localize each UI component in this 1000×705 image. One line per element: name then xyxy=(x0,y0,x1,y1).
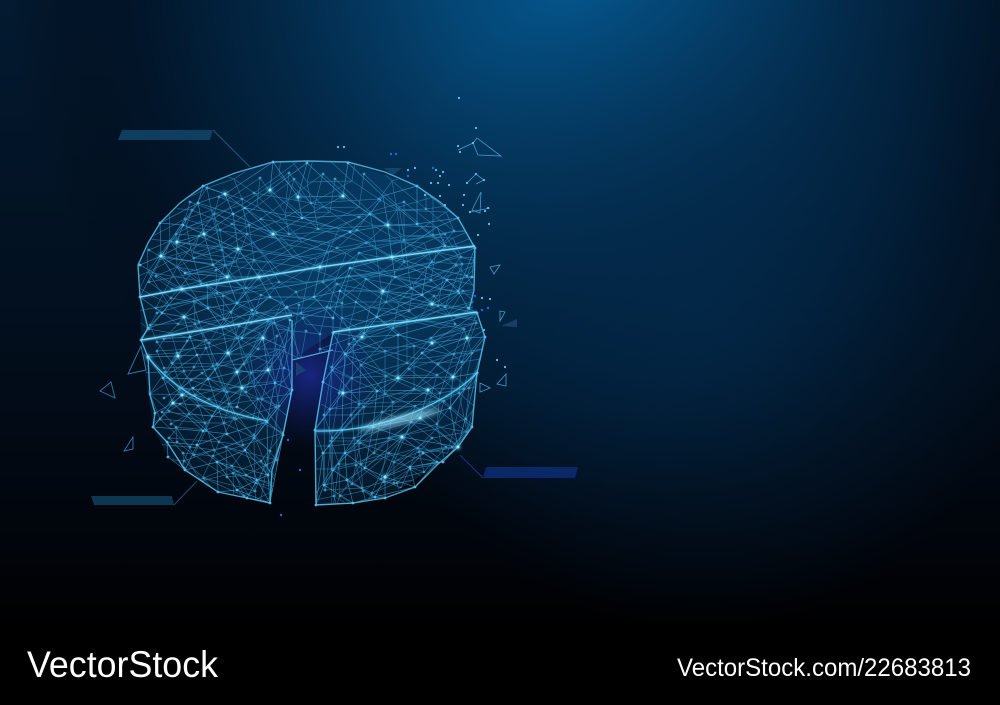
wedge gap glow xyxy=(250,300,370,450)
wireframe mesh xyxy=(140,162,485,505)
watermark: image URL and id: VectorStock.com/22683813 xyxy=(677,654,971,682)
pie chart made of connected wireframe polygons xyxy=(137,160,486,506)
light flare on right slice xyxy=(358,406,442,434)
triangle fragments at right of pie xyxy=(296,168,517,392)
triangle fragments at left of pie xyxy=(100,346,146,451)
callout: right label bar with leader line xyxy=(460,455,578,478)
denser mesh layers clipped to the pie body xyxy=(139,162,484,504)
mesh nodes xyxy=(140,162,485,505)
floating particles and triangle fragments at upper right xyxy=(281,98,505,515)
outer contour strokes xyxy=(138,161,485,505)
bright slice edges xyxy=(140,246,478,431)
bright glowing nodes xyxy=(148,190,467,477)
callout: bottom left label bar with leader line xyxy=(91,481,197,505)
callout: top left label bar with leader line xyxy=(118,130,250,167)
pie body tint xyxy=(138,162,485,505)
watermark: VectorStock logo text: VectorStock xyxy=(27,644,218,685)
